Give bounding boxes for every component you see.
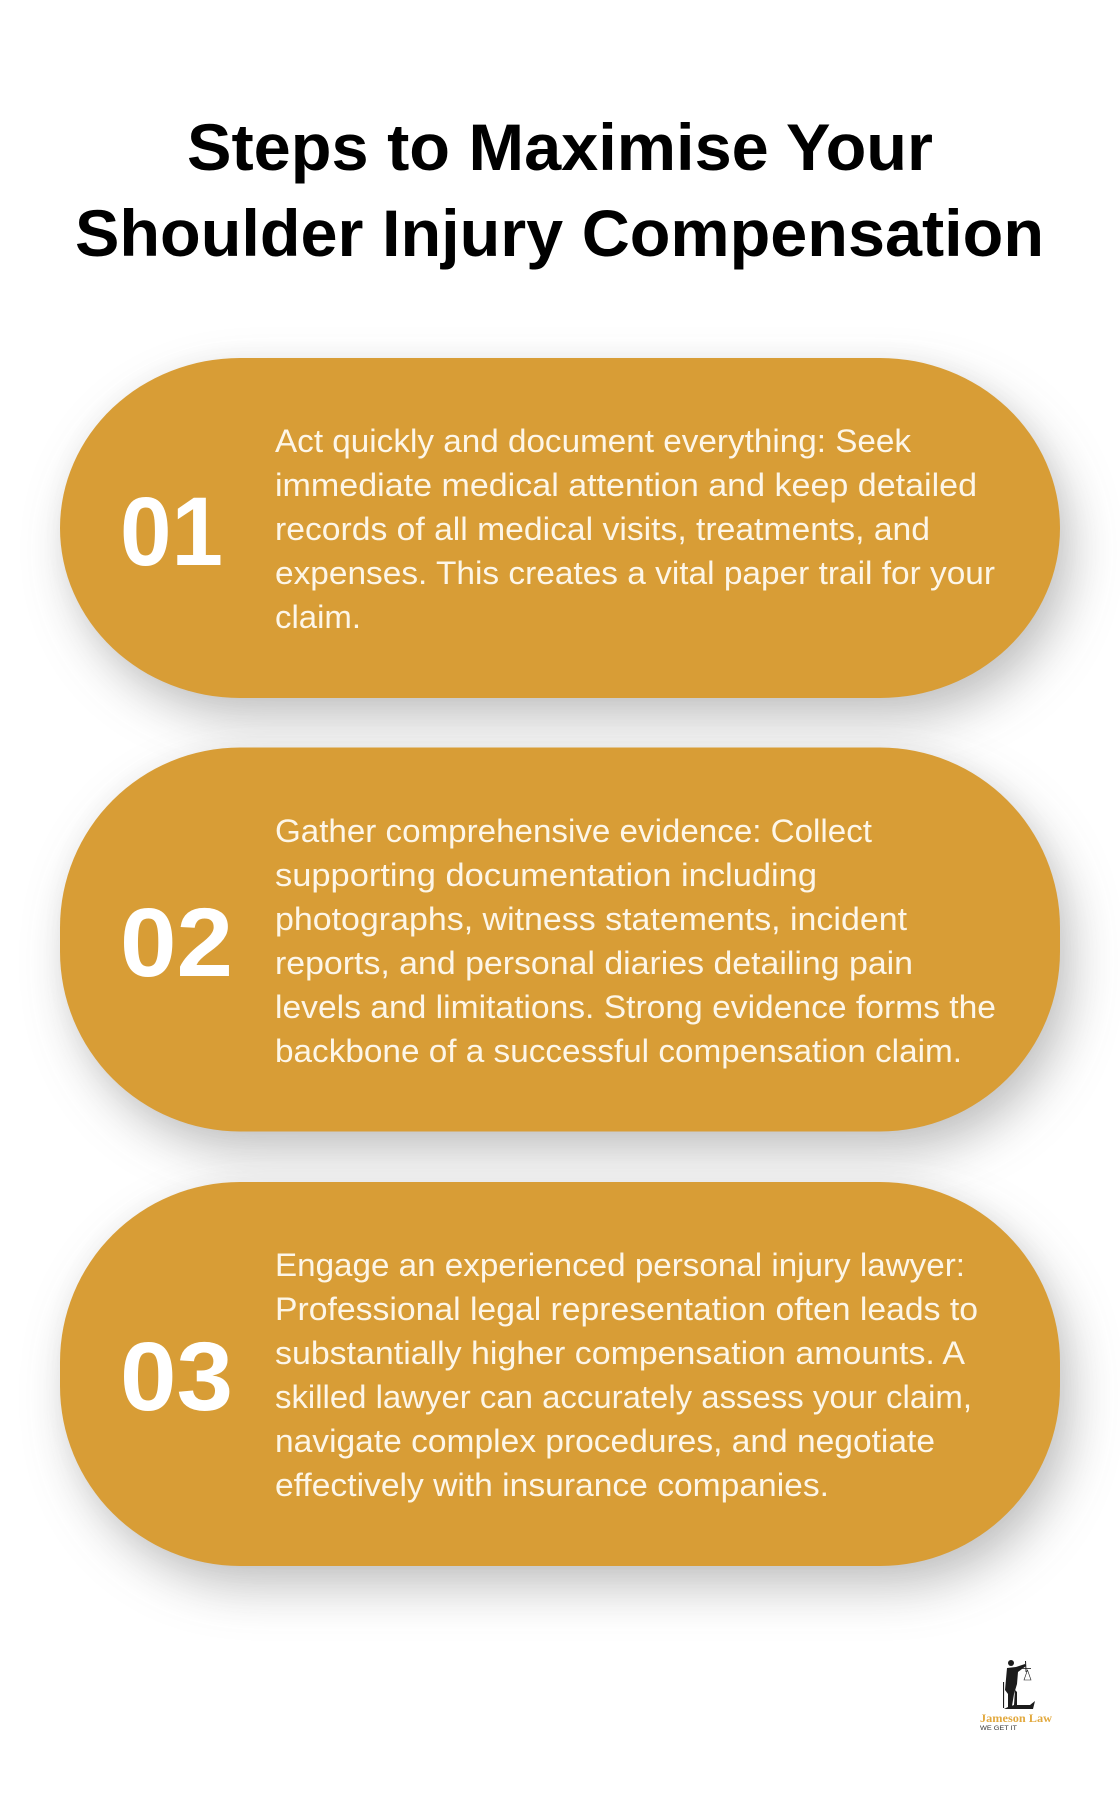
brand name: Jameson Law <box>980 1713 1053 1725</box>
card background 01 <box>60 358 1060 698</box>
logo: Jameson Law <box>980 1660 1053 1732</box>
number 01: 01 <box>120 477 223 586</box>
title: Shoulder Injury Compensation <box>75 196 1044 270</box>
panel: step 03 <box>60 1182 1060 1566</box>
text block 02: backbone of a successful compensation claim. <box>275 1033 962 1069</box>
text block 03: Engage an experienced personal injury lawyer: <box>275 1247 965 1283</box>
text block 03 <box>275 1247 978 1503</box>
text block 01 <box>275 423 995 635</box>
title <box>75 110 1044 270</box>
tagline: WE GET IT <box>980 1725 1017 1732</box>
text block 02 <box>275 813 996 1069</box>
text block 02: Gather comprehensive evidence: Collect <box>275 813 872 849</box>
text block 02: reports, and personal diaries detailing pain <box>275 945 913 981</box>
text block 03: substantially higher compensation amounts. A <box>275 1335 966 1371</box>
card background 02 <box>60 748 1060 1132</box>
text block 01: immediate medical attention and keep detailed <box>275 467 977 503</box>
text block 02: photographs, witness statements, incident <box>275 901 907 937</box>
number 03: 03 <box>120 1322 233 1431</box>
text block 02: levels and limitations. Strong evidence forms the <box>275 989 996 1025</box>
number 02: 02 <box>120 888 233 997</box>
panel: step 01 <box>60 358 1060 698</box>
text block 02: supporting documentation including <box>275 857 817 893</box>
panel: step 02 <box>60 748 1060 1132</box>
text block 01: expenses. This creates a vital paper trail for your <box>275 555 995 591</box>
title: Steps to Maximise Your <box>187 110 933 184</box>
text block 01: Act quickly and document everything: Seek <box>275 423 912 459</box>
text block 03: effectively with insurance companies. <box>275 1467 829 1503</box>
text block 03: Professional legal representation often leads to <box>275 1291 978 1327</box>
text block 01: records of all medical visits, treatments, and <box>275 511 930 547</box>
text block 01: claim. <box>275 599 361 635</box>
card background 03 <box>60 1182 1060 1566</box>
text block 03: skilled lawyer can accurately assess your claim, <box>275 1379 972 1415</box>
icon: lady justice figure <box>1003 1660 1035 1709</box>
text block 03: navigate complex procedures, and negotiate <box>275 1423 935 1459</box>
